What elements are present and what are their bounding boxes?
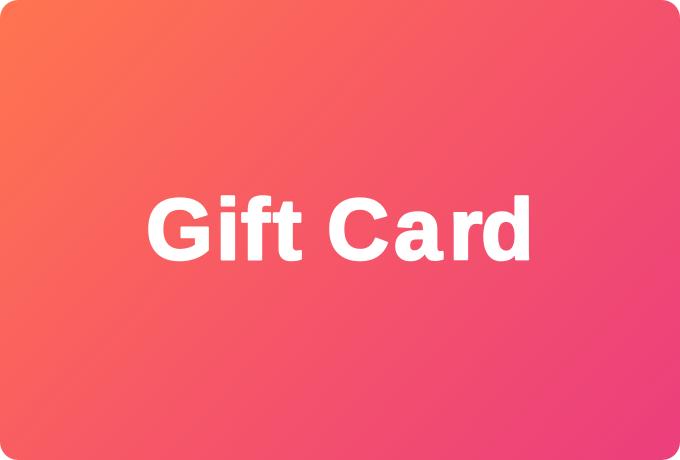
title: Gift Card: Gift xyxy=(146,182,302,278)
title: Gift Card: Card xyxy=(327,182,534,278)
